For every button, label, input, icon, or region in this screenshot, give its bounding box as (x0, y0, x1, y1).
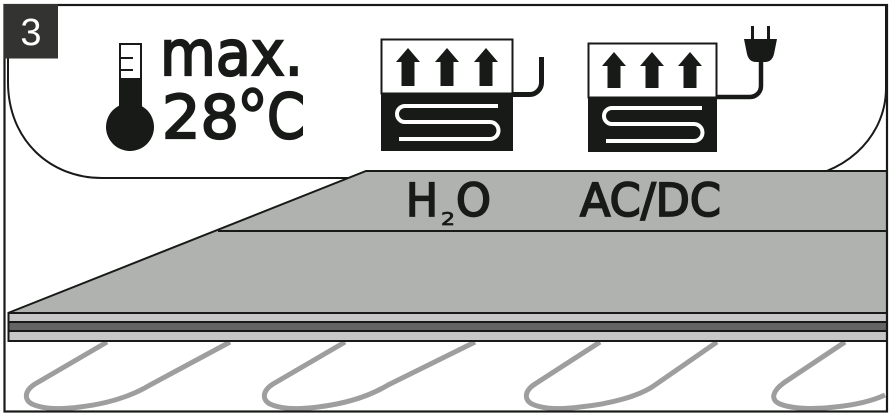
label: AC/DC: AC/DC (580, 174, 721, 227)
label: H2O: 2 (441, 209, 455, 230)
step number badge: 3 (20, 12, 42, 54)
icon: water heating (381, 40, 542, 151)
label: H2O: H (406, 174, 438, 227)
label: H2O: O (456, 174, 491, 227)
floor top surface (8, 171, 887, 313)
temperature text: max. (160, 17, 303, 90)
step number badge (4, 4, 58, 58)
icon: thermometer (106, 44, 154, 151)
info panel (8, 6, 886, 178)
floor layers (8, 313, 887, 341)
temperature text (160, 17, 305, 153)
heating pipes (26, 342, 885, 409)
icon: electric heating (588, 26, 777, 152)
label: H2O (406, 174, 491, 230)
temperature text: C (267, 80, 305, 153)
temperature text: 28 (162, 83, 239, 153)
